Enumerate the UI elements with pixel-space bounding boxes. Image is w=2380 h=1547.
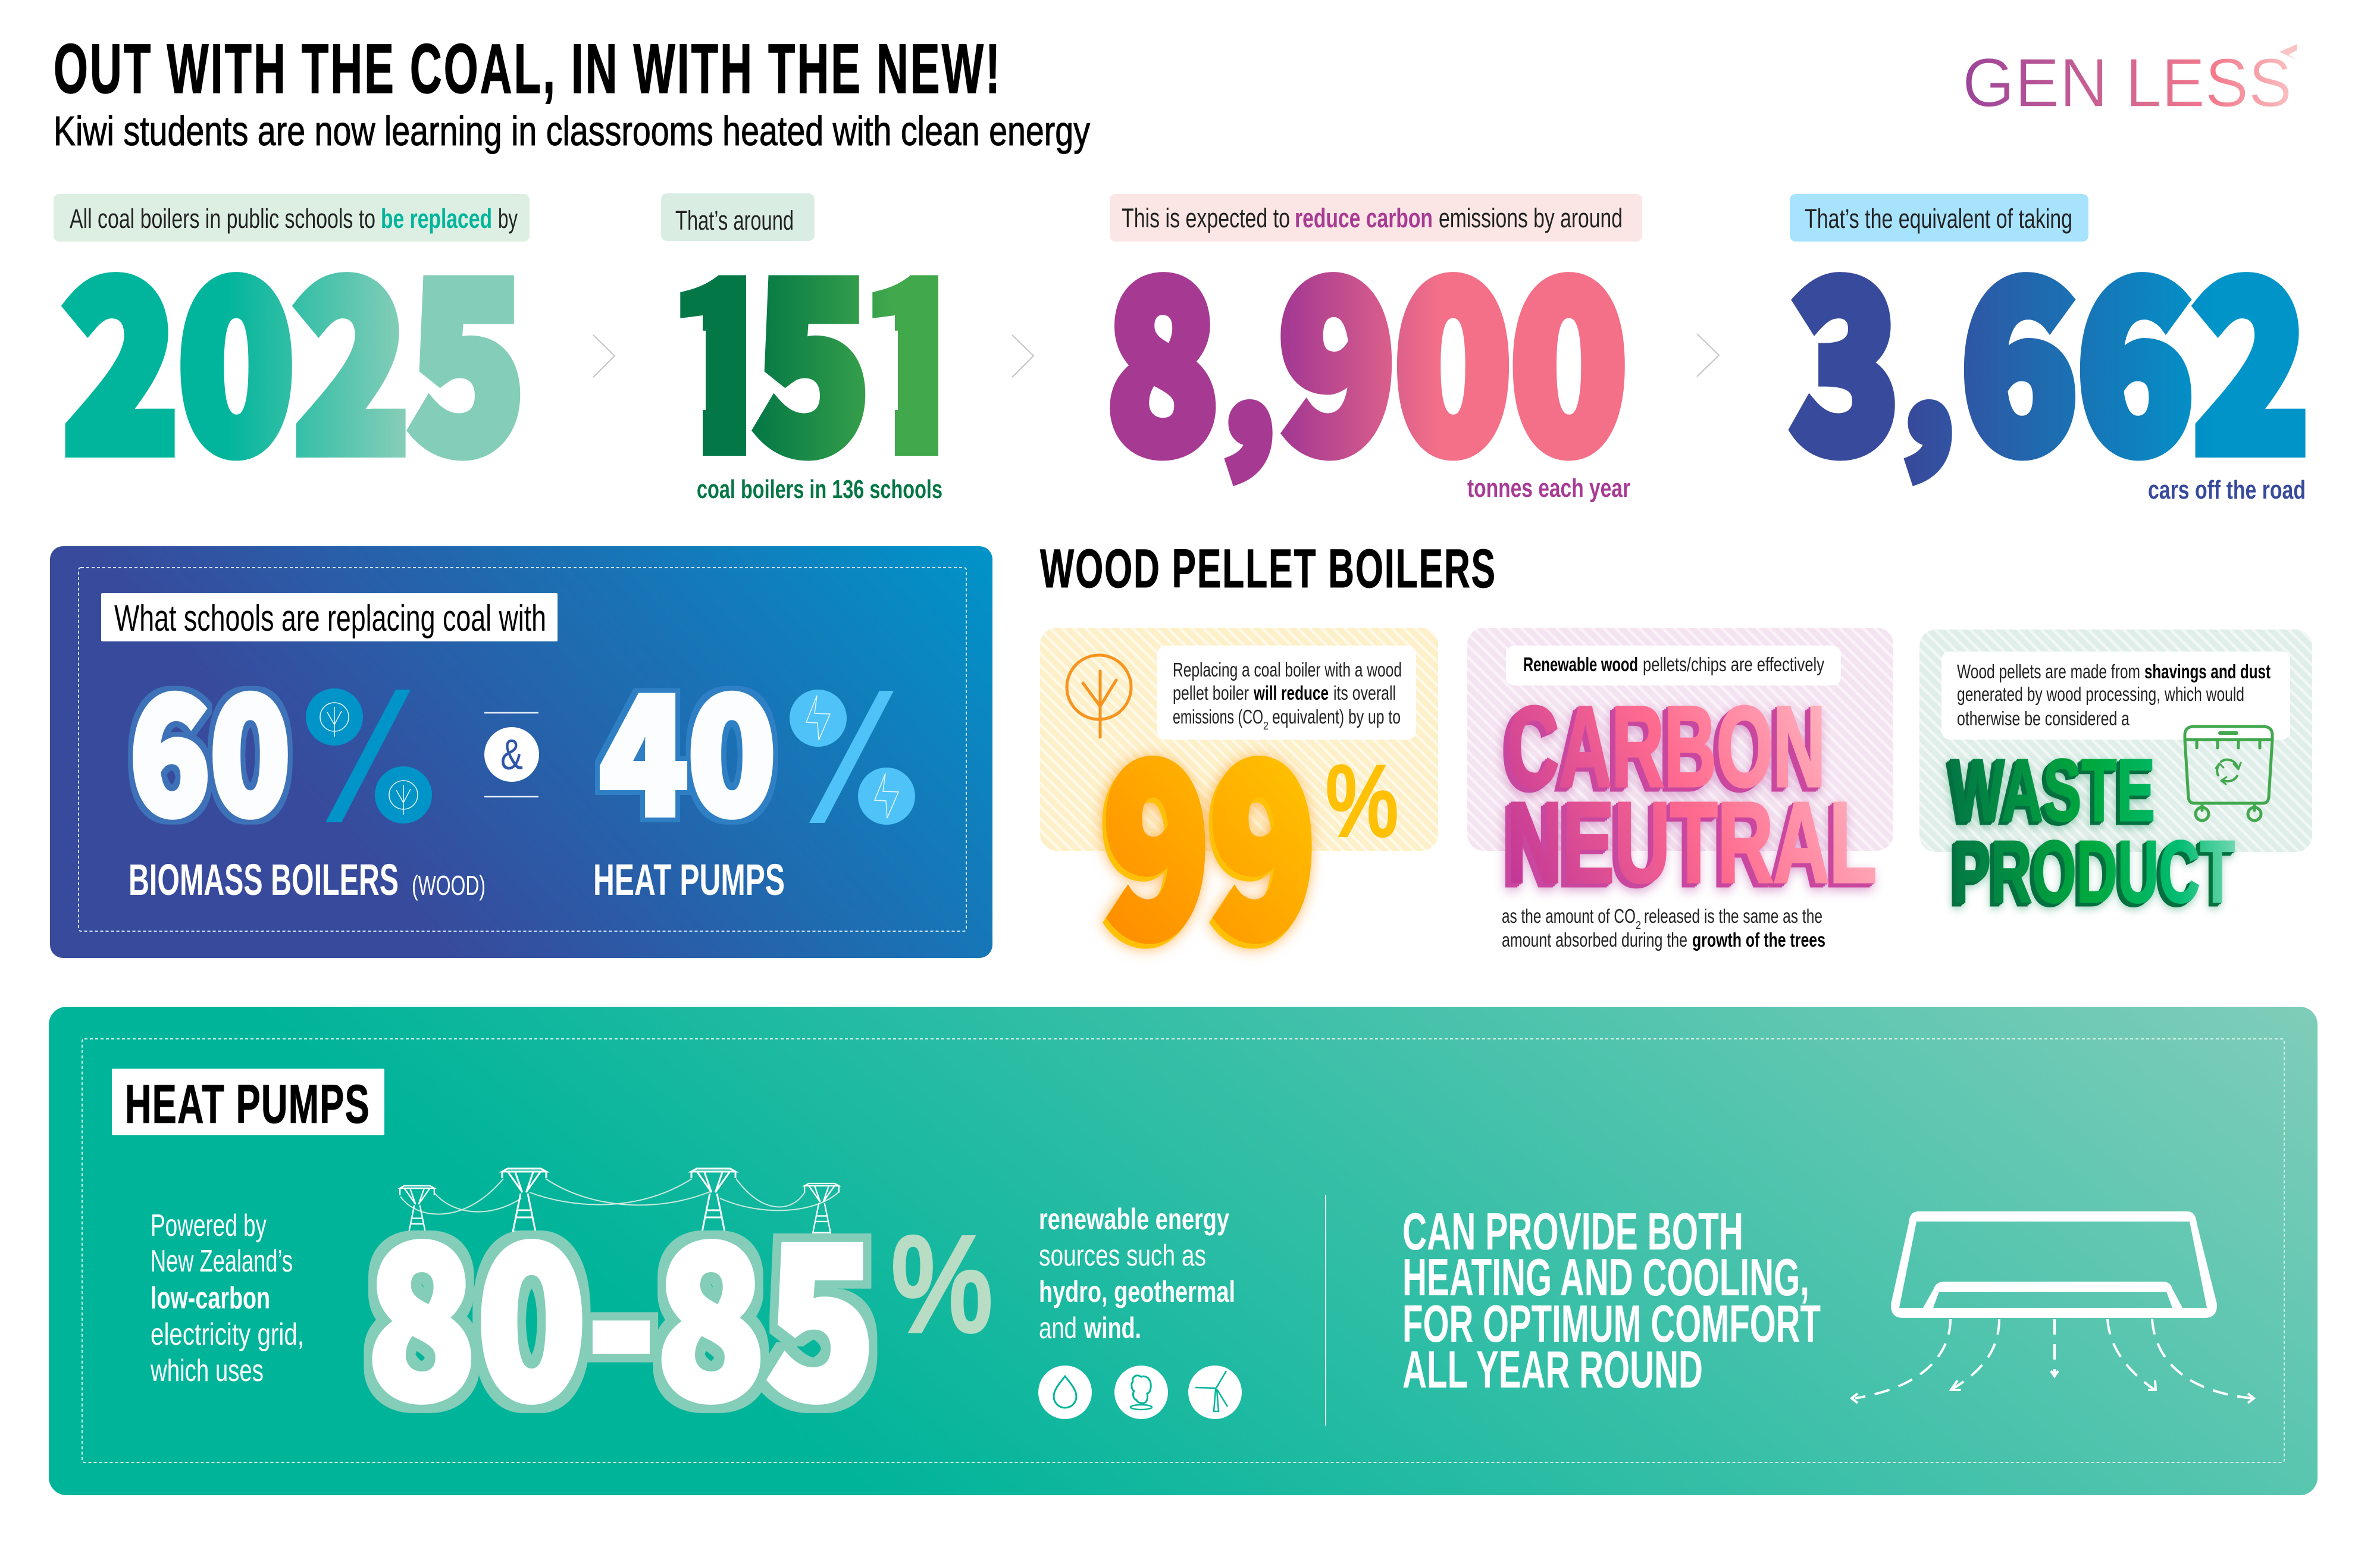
60 percent: 60 — [130, 627, 290, 861]
stat 1: 2025 — [54, 183, 530, 518]
stat 4: 3,662 — [1790, 183, 2309, 518]
caption: tonnes each year — [1467, 474, 1630, 503]
chip: reduce carbon: This is expected to — [1122, 203, 1290, 233]
text box: pellet boiler — [1173, 682, 1249, 704]
icon: tree — [306, 688, 363, 746]
caption: cars off the road — [2148, 475, 2306, 505]
chip: equivalent — [1790, 194, 2088, 242]
logo: Gen Less: GEN — [1962, 44, 2108, 121]
number 8,900: 8 — [1107, 183, 1219, 518]
text box — [1506, 646, 1841, 685]
number 3,662: 662 — [1961, 183, 2309, 518]
text box: otherwise be considered a — [1957, 707, 2130, 729]
text box: its overall — [1333, 682, 1396, 704]
text: heating and cooling: ALL YEAR ROUND — [1402, 1340, 1703, 1399]
title: OUT WITH THE COAL, IN WITH THE NEW! — [54, 30, 1002, 108]
text box: equivalent) by up to — [1272, 706, 1401, 728]
text below: growth of the trees — [1692, 929, 1825, 951]
number 3,662: , — [1903, 247, 1953, 488]
heading chip — [112, 1069, 384, 1135]
icon: recycling bin — [2185, 726, 2272, 821]
chip: reduce carbon: emissions by around — [1439, 203, 1623, 233]
text: powered by: Powered by — [151, 1208, 267, 1243]
arrow — [1697, 334, 1719, 377]
text: powered by: New Zealand’s — [151, 1244, 293, 1279]
percent sign: % — [891, 1208, 992, 1359]
icon: lightning — [858, 768, 915, 825]
panel: what schools are replacing coal with — [50, 546, 992, 958]
40 percent: 40 — [600, 627, 776, 861]
text: renewable energy: wind. — [1083, 1311, 1141, 1345]
big text: product: PRODUCT — [1953, 823, 2235, 921]
text box — [1157, 646, 1416, 740]
number 2025: 2025 — [63, 183, 525, 518]
number 3,662 — [1791, 183, 2309, 518]
panel: 99 percent — [1040, 628, 1438, 1004]
text box: Renewable wood — [1523, 653, 1638, 675]
40 percent — [600, 627, 915, 861]
icon: tree — [375, 766, 432, 823]
text: heating and cooling: HEATING AND COOLING, — [1402, 1248, 1809, 1307]
big text: waste: WASTE — [1950, 741, 2155, 840]
number 3,662: 3 — [1791, 183, 1899, 518]
text: heating and cooling: CAN PROVIDE BOTH — [1402, 1202, 1743, 1261]
subtitle: Kiwi students are now learning in classrooms heated with clean energy — [54, 108, 1090, 154]
chip: be replaced by: All coal boilers in public schools to — [70, 203, 375, 234]
chip: be replaced by: by — [498, 203, 518, 234]
text: heating and cooling: FOR OPTIMUM COMFORT — [1402, 1294, 1821, 1353]
text: renewable energy: hydro, geothermal — [1039, 1275, 1235, 1308]
ampersand — [484, 713, 539, 797]
heading chip — [101, 593, 558, 641]
text box: emissions (CO — [1173, 706, 1263, 728]
text: powered by: electricity grid, — [151, 1317, 304, 1352]
logo: Gen Less — [1962, 44, 2297, 121]
number 8,900 — [1107, 183, 1627, 518]
text box — [1941, 652, 2290, 740]
text: renewable energy: sources such as — [1039, 1239, 1206, 1272]
icon: geothermal — [1114, 1366, 1168, 1419]
text: powered by: low-carbon — [151, 1281, 270, 1316]
illustration: pylons and wires — [400, 1169, 839, 1239]
text below: as the amount of CO — [1502, 905, 1636, 927]
chip: that's around — [661, 193, 815, 241]
heading chip: What schools are replacing coal with — [114, 598, 546, 639]
number 8,900: , — [1224, 247, 1274, 488]
text below: amount absorbed during the — [1502, 929, 1687, 951]
arrow — [593, 335, 615, 377]
text: renewable energy: and — [1039, 1311, 1077, 1345]
ampersand: & — [500, 731, 523, 779]
percent sign: % — [1326, 745, 1398, 857]
label: biomass boilers: BIOMASS BOILERS — [129, 855, 399, 904]
heading: wood pellet boilers: WOOD PELLET BOILERS — [1040, 538, 1496, 599]
text below: 2 — [1636, 919, 1641, 931]
60 percent — [130, 627, 432, 861]
number 151 — [680, 275, 938, 461]
chip: be replaced by — [54, 194, 530, 242]
stat 2: 151 — [661, 193, 942, 499]
chip: that's around: That’s around — [675, 205, 794, 236]
text: powered by — [150, 1208, 304, 1388]
divider — [1325, 1195, 1326, 1426]
stat 3: 8,900 — [1107, 183, 1642, 518]
text box: shavings and dust — [2144, 660, 2271, 682]
number 8,900: 900 — [1279, 183, 1627, 518]
text: powered by: which uses — [150, 1354, 264, 1388]
text box: Wood pellets are made from — [1957, 660, 2140, 682]
panel: heat pumps — [49, 1007, 2318, 1495]
caption: coal boilers in 136 schools — [697, 475, 942, 504]
chip: reduce carbon — [1110, 194, 1642, 242]
text box: generated by wood processing, which would — [1957, 683, 2244, 705]
panel: carbon neutral — [1467, 628, 1893, 951]
text box: Replacing a coal boiler with a wood — [1173, 659, 1402, 681]
icon: water drop — [1038, 1366, 1092, 1419]
arrows: airflow — [1852, 1319, 2254, 1403]
heading chip: HEAT PUMPS — [125, 1074, 370, 1135]
number 151: 5 — [754, 183, 870, 518]
text below — [1502, 905, 1825, 951]
icon: wind turbine — [1188, 1366, 1242, 1419]
number 80-85: 80-85 — [367, 1154, 876, 1459]
number 151: 1 — [668, 183, 781, 518]
chip: reduce carbon: reduce carbon — [1295, 203, 1433, 233]
text box: 2 — [1263, 720, 1269, 732]
logo: Gen Less: LESS — [2125, 44, 2292, 121]
panel: waste product — [1919, 630, 2312, 921]
number 151: 1 — [860, 183, 973, 518]
chip: equivalent: That’s the equivalent of taking — [1805, 203, 2072, 234]
arrow — [1012, 335, 1034, 377]
text box: pellets/chips are effectively — [1643, 653, 1824, 675]
icon: tree — [1067, 655, 1131, 737]
text below: released is the same as the — [1644, 905, 1822, 927]
number 99: 99 — [1103, 663, 1316, 1004]
label: biomass boilers: (WOOD) — [412, 870, 486, 901]
text: renewable energy — [1039, 1202, 1235, 1345]
big text: neutral: NEUTRAL — [1507, 778, 1877, 906]
chip: be replaced by: be replaced — [381, 203, 492, 234]
text: heating and cooling — [1402, 1202, 1821, 1399]
icon: air conditioner — [1852, 1211, 2254, 1403]
icon: lightning — [790, 690, 847, 747]
big text: carbon: CARBON — [1507, 682, 1825, 810]
text: renewable energy: renewable energy — [1039, 1202, 1229, 1236]
label: heat pumps: HEAT PUMPS — [593, 855, 785, 904]
text box: will reduce — [1253, 682, 1329, 704]
